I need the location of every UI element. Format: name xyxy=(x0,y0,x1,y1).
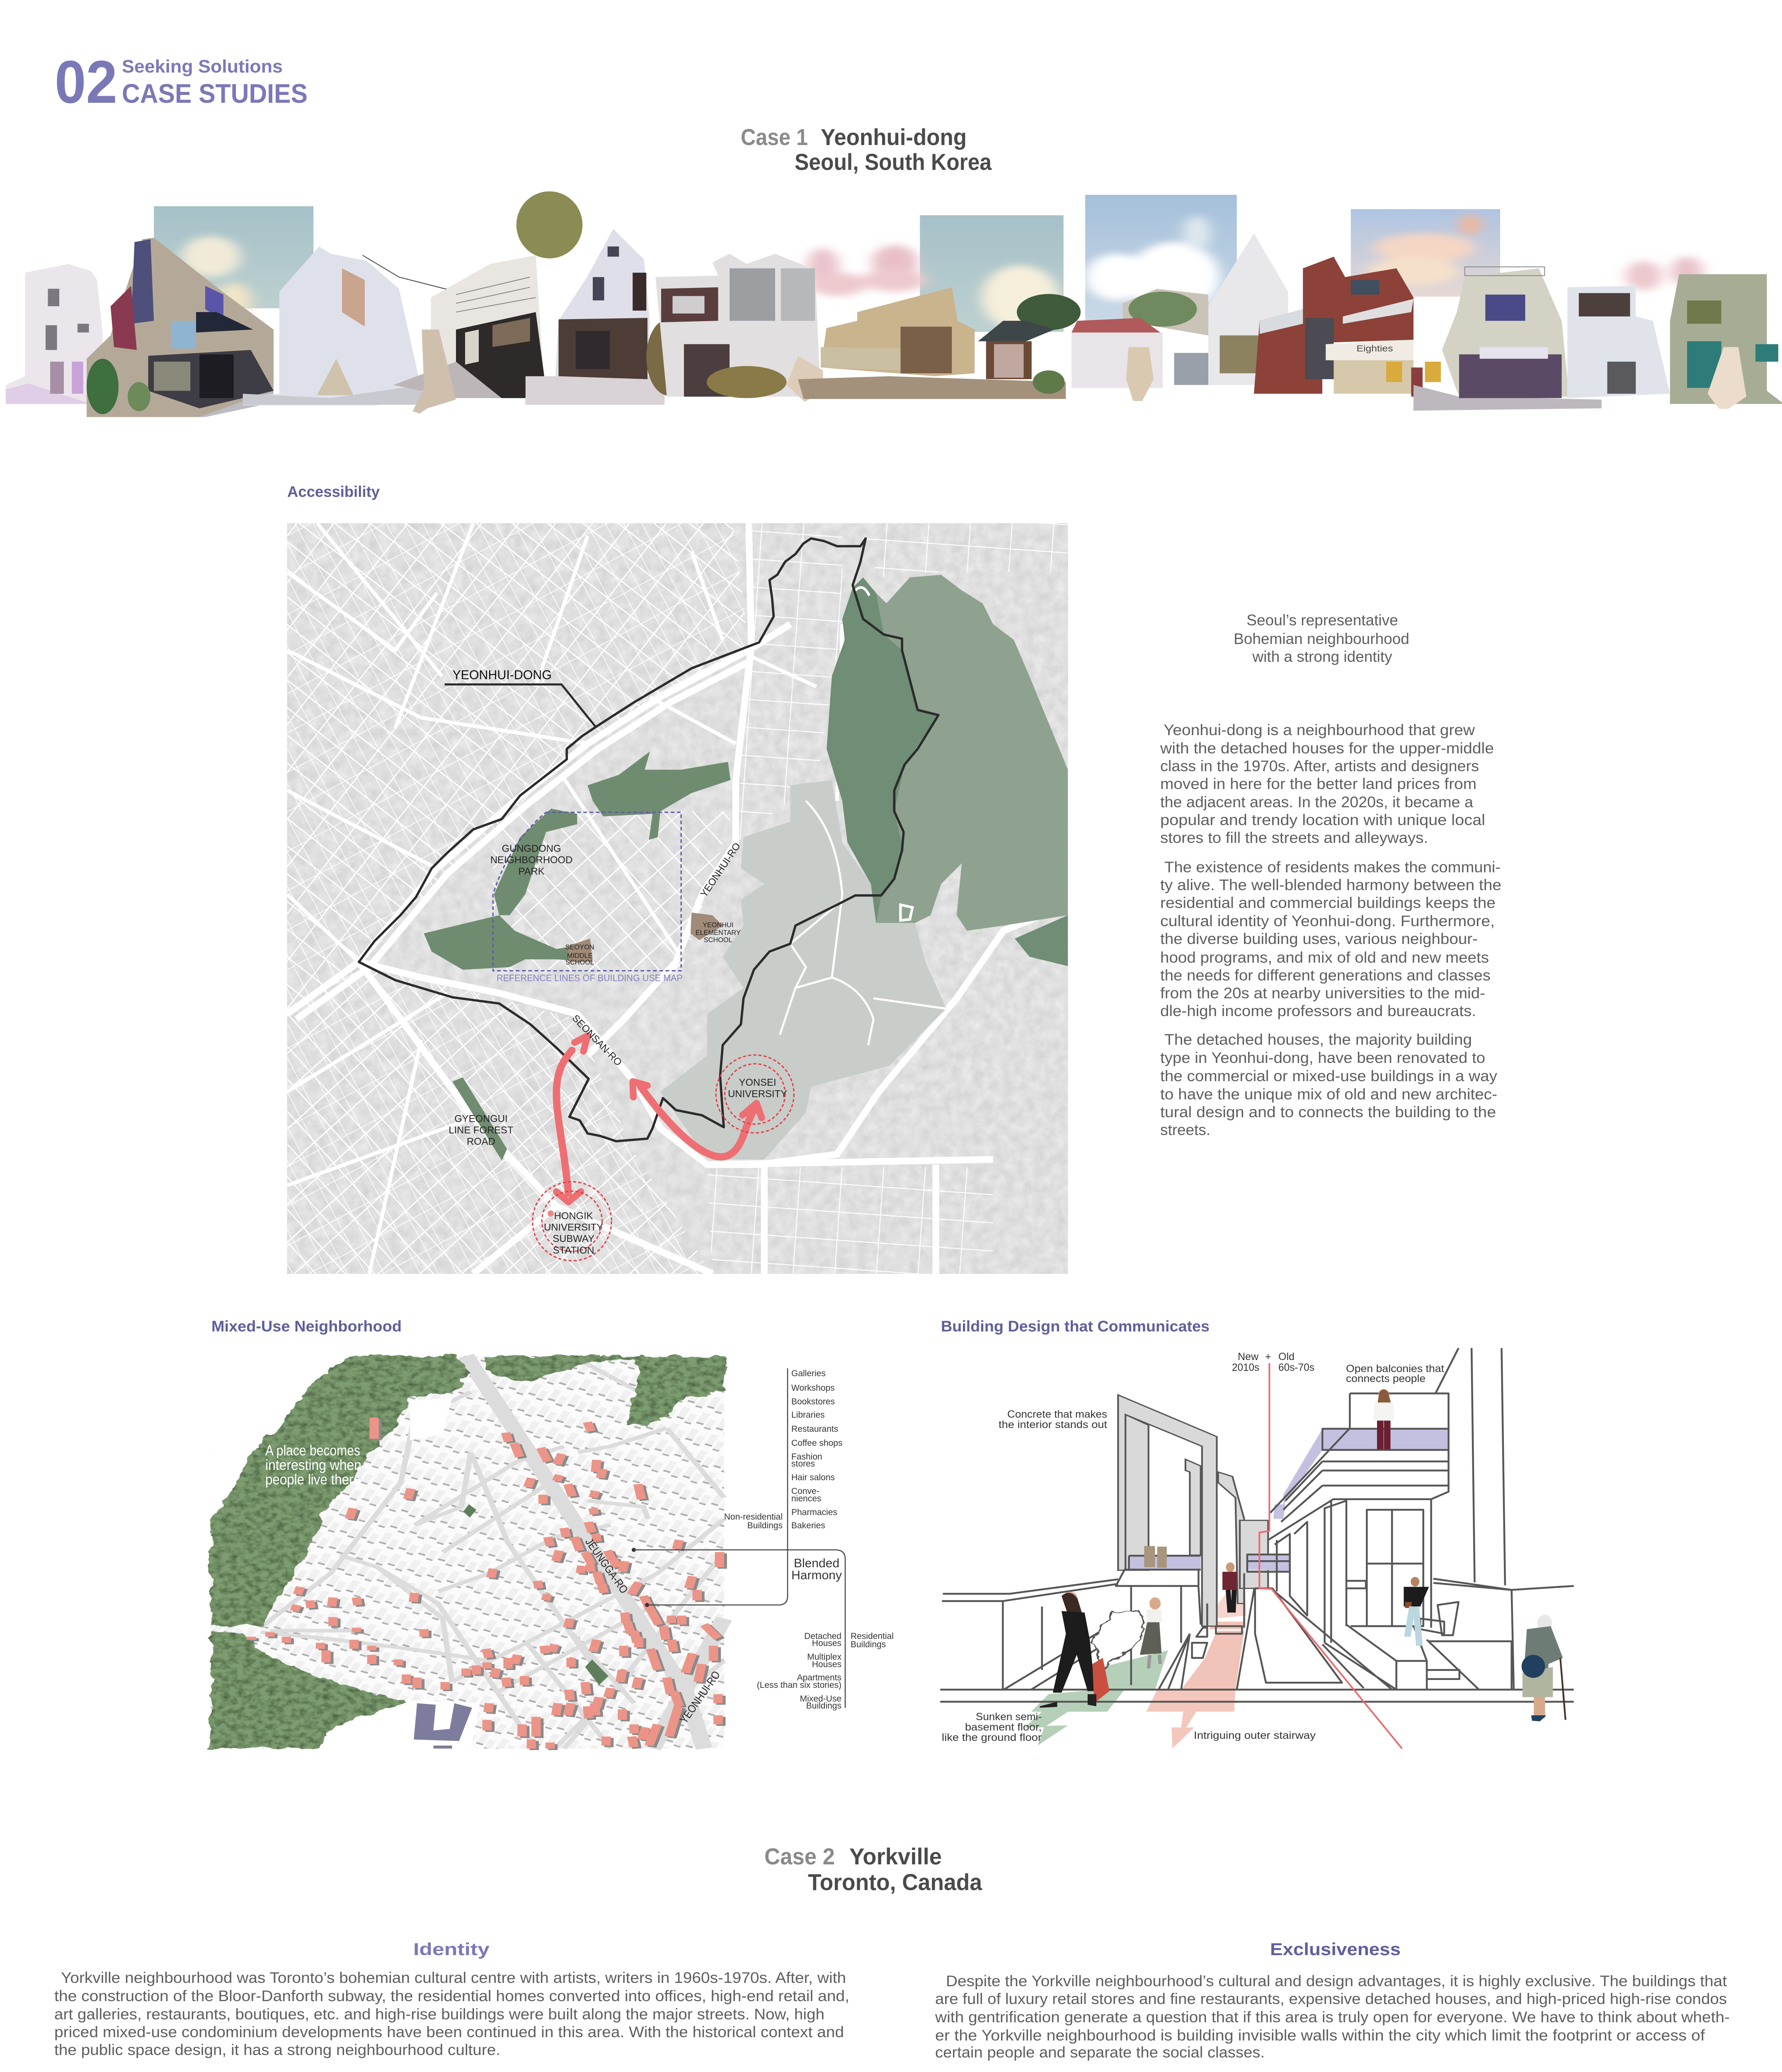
map place labels: SCHOOL xyxy=(565,959,594,966)
residential building list: Houses xyxy=(812,1639,841,1648)
case 1 title xyxy=(741,124,992,175)
alley annotations: connects people xyxy=(1346,1373,1426,1385)
alley annotations: Old xyxy=(1278,1351,1295,1363)
alley annotations: basement floor, xyxy=(965,1721,1042,1733)
Yeonhui-dong description: popular and trendy location with unique local xyxy=(1160,811,1485,828)
Yeonhui-dong description: from the 20s at nearby universities to the mid- xyxy=(1160,985,1485,1002)
case 1 title: Case 1 xyxy=(741,124,808,150)
Yeonhui-dong description: type in Yeonhui-dong, have been renovated to xyxy=(1160,1049,1485,1066)
person: woman with bag xyxy=(1404,1577,1429,1646)
Hongik University subway station marker: UNIVERSITY xyxy=(544,1222,603,1233)
intro statement xyxy=(1234,612,1409,665)
purple cafe building xyxy=(87,238,274,417)
map place labels: ROAD xyxy=(467,1136,495,1147)
intro statement: with a strong identity xyxy=(1252,648,1392,665)
map place labels: LINE FOREST xyxy=(449,1125,513,1136)
Yonsei University marker: UNIVERSITY xyxy=(728,1088,787,1099)
pink-roofed house xyxy=(1072,289,1214,401)
storefront building xyxy=(393,255,547,414)
alley annotations: Intriguing outer stairway xyxy=(1194,1730,1316,1741)
person: elderly woman with cane xyxy=(1522,1615,1566,1721)
Hongik University subway station marker: STATION xyxy=(553,1245,594,1256)
case 1 title: Seoul, South Korea xyxy=(795,149,992,175)
residential building list: Detached xyxy=(804,1631,841,1641)
map place labels: GYEONGUI xyxy=(454,1113,508,1125)
Yeonhui-dong description: the adjacent areas. In the 2020s, it became a xyxy=(1160,794,1473,811)
blended harmony legend connectors xyxy=(632,1368,845,1708)
building design heading: Building Design that Communicates xyxy=(941,1318,1210,1335)
white cone building xyxy=(243,247,536,405)
Yeonhui-dong description: dle-high income professors and bureaucrats. xyxy=(1160,1002,1476,1019)
Yeonhui-dong description: streets. xyxy=(1160,1121,1210,1138)
identity heading: Identity xyxy=(413,1939,490,1959)
residential building list xyxy=(757,1631,894,1711)
neighbourhood parks xyxy=(424,751,730,1160)
case 2 title: Toronto, Canada xyxy=(808,1869,982,1895)
small white house xyxy=(6,264,103,404)
alley annotations: New xyxy=(1238,1351,1259,1363)
street collage of Yeonhui-dong buildings xyxy=(6,191,1782,417)
identity text: the public space design, it has a strong neighbourhood culture. xyxy=(54,2041,500,2058)
map place labels: SCHOOL xyxy=(704,937,732,944)
non-residential building list: Bakeries xyxy=(791,1521,825,1530)
beige corner building xyxy=(1413,267,1602,411)
alley annotations xyxy=(942,1351,1444,1743)
residential building list: Buildings xyxy=(806,1701,841,1711)
Yeonhui-dong description: the diverse building uses, various neighbour- xyxy=(1160,930,1478,947)
map quote: people live there xyxy=(265,1472,361,1488)
red brick building: Eighties xyxy=(1357,344,1393,353)
case 2 title: Yorkville xyxy=(849,1843,942,1869)
balcony glazing xyxy=(1129,1429,1449,1572)
Hongik University subway station marker: HONGIK xyxy=(554,1210,593,1222)
section heading xyxy=(55,48,308,116)
map quote xyxy=(265,1443,361,1488)
exclusiveness text: certain people and separate the social classes. xyxy=(935,2044,1265,2061)
intro statement: Seoul’s representative xyxy=(1246,612,1398,629)
map place labels: YEONHUI-RO xyxy=(698,841,743,899)
residential building list: Apartments xyxy=(797,1673,841,1682)
non-residential building list: Coffee shops xyxy=(791,1438,842,1448)
map place labels: MIDDLE xyxy=(567,952,593,959)
exclusiveness text: with gentrification generate a question that if this area is truly open for everyone. We have to think about wheth- xyxy=(935,2009,1730,2026)
Yeonhui-dong description: Yeonhui-dong is a neighbourhood that grew xyxy=(1164,721,1475,738)
Yeonhui-dong description: class in the 1970s. After, artists and designers xyxy=(1160,758,1479,775)
exclusiveness text: Despite the Yorkville neighbourhood’s cultural and design advantages, it is highly exclusive. The buildings that xyxy=(946,1973,1727,1990)
map road names xyxy=(583,1536,722,1726)
map place labels: GUNGDONG xyxy=(502,843,561,854)
Yeonhui-dong description: tural design and to connects the building to the xyxy=(1160,1104,1496,1121)
residential building list: Mixed-Use xyxy=(800,1694,841,1704)
Yeonhui-dong description: to have the unique mix of old and new architec- xyxy=(1160,1086,1497,1103)
olive moon xyxy=(516,191,582,259)
reference lines of building use map xyxy=(493,812,683,983)
section heading: CASE STUDIES xyxy=(122,78,308,109)
map place labels: ELEMENTARY xyxy=(696,929,741,937)
alley annotations: Sunken semi- xyxy=(976,1711,1042,1723)
Yeonhui-dong description: with the detached houses for the upper-middle xyxy=(1160,740,1494,757)
exclusiveness text: er the Yorkville neighbourhood is building invisible walls within the city which limit the footprint or access of xyxy=(935,2027,1705,2044)
people in the alley xyxy=(1040,1389,1566,1721)
Yeonhui-dong description xyxy=(1160,721,1501,1138)
alley annotations: Open balconies that xyxy=(1346,1363,1444,1375)
case 2 title xyxy=(764,1843,982,1895)
non-residential building list: Fashion xyxy=(791,1452,822,1462)
pocket greens xyxy=(463,1504,609,1685)
new and old divider line xyxy=(1259,1363,1402,1749)
tan brick house and hanok gate xyxy=(798,287,1081,399)
Yeonhui-dong description: moved in here for the better land prices from xyxy=(1160,775,1477,792)
non-residential building list: Conve- xyxy=(791,1486,819,1496)
Yonsei campus area xyxy=(660,780,946,1159)
concrete frames xyxy=(1118,1395,1268,1626)
accessibility heading: Accessibility xyxy=(287,483,380,500)
map road names: JEUNGGA-RO xyxy=(583,1536,630,1596)
alley linework xyxy=(940,1348,1574,1702)
non-residential building list: stores xyxy=(791,1459,815,1469)
road network xyxy=(261,1356,724,1749)
Yeonhui-dong description: the commercial or mixed-use buildings in a way xyxy=(1160,1067,1498,1084)
case 2 title: Case 2 xyxy=(764,1843,835,1869)
non-residential building list: Buildings xyxy=(747,1521,783,1530)
residential building list: Buildings xyxy=(851,1640,886,1649)
walking route arrows xyxy=(556,1036,762,1202)
neighbourhood label with leader xyxy=(445,668,595,726)
alley annotations: + xyxy=(1265,1351,1271,1363)
case 1 title: Yeonhui-dong xyxy=(821,124,967,150)
Yeonhui-dong description: ty alive. The well-blended harmony between the xyxy=(1160,876,1501,893)
non-residential building list: niences xyxy=(791,1494,821,1503)
neighbourhood label with leader: YEONHUI-DONG xyxy=(452,668,552,682)
map place labels: PARK xyxy=(519,866,545,877)
Yeonhui-dong description: cultural identity of Yeonhui-dong. Furthermore, xyxy=(1160,913,1495,929)
person: man on stairs xyxy=(1222,1562,1237,1612)
non-residential building list: Libraries xyxy=(791,1410,825,1420)
university block xyxy=(414,1703,472,1749)
Yeonhui-dong description: residential and commercial buildings keeps the xyxy=(1160,894,1496,911)
map place labels: YEONHUI xyxy=(703,921,733,929)
Yeonhui-dong boundary line xyxy=(359,538,938,1141)
small white and green buildings xyxy=(1567,274,1782,409)
people on terrace xyxy=(1144,1546,1167,1568)
Yeonhui-dong description: hood programs, and mix of old and new meets xyxy=(1160,949,1489,966)
map road names: YEONHUI-RO xyxy=(677,1669,722,1726)
map place labels: SEOYON xyxy=(565,944,594,951)
Yeonhui-dong description: The existence of residents makes the communi- xyxy=(1164,859,1501,876)
non-residential building list: Bookstores xyxy=(791,1397,835,1406)
map quote: A place becomes xyxy=(265,1443,360,1459)
map place labels xyxy=(449,841,743,1147)
mixed-use buildings xyxy=(251,1418,722,1750)
identity text: priced mixed-use condominium developments have been continued in this area. With the historical context and xyxy=(54,2024,844,2041)
accessibility map xyxy=(287,523,1068,1274)
non-residential building list: Restaurants xyxy=(791,1424,838,1434)
person: woman in grey skirt xyxy=(1140,1598,1161,1668)
non-residential building list: Pharmacies xyxy=(791,1508,837,1517)
Yeonhui-dong description: the needs for different generations and classes xyxy=(1160,967,1491,984)
alley annotations: like the ground floor xyxy=(942,1732,1042,1743)
white gable house xyxy=(526,229,664,405)
alley annotations: Concrete that makes xyxy=(1007,1409,1107,1420)
building use map xyxy=(211,1356,724,1750)
white outer areas xyxy=(211,1356,480,1749)
large forest xyxy=(827,575,1068,966)
tall white house xyxy=(1208,233,1288,385)
Yonsei University marker xyxy=(716,1055,794,1133)
section heading: Seeking Solutions xyxy=(122,56,283,77)
alley perspective drawing xyxy=(940,1348,1574,1749)
blended harmony label: Harmony xyxy=(791,1569,842,1582)
blended harmony label xyxy=(791,1556,842,1582)
gray modern house xyxy=(646,254,823,402)
Hongik University subway station marker xyxy=(533,1182,611,1261)
mixed-use heading: Mixed-Use Neighborhood xyxy=(211,1318,402,1335)
blended harmony label: Blended xyxy=(794,1556,839,1570)
map place labels: SEONSAN-RO xyxy=(570,1013,624,1068)
Hongik University subway station marker: SUBWAY xyxy=(553,1233,594,1244)
green hillsides xyxy=(211,1356,724,1749)
person: woman on balcony xyxy=(1373,1389,1394,1449)
colored floors xyxy=(1025,1572,1246,1749)
exclusiveness heading: Exclusiveness xyxy=(1270,1939,1401,1959)
non-residential building list xyxy=(724,1369,842,1530)
residential building list: (Less than six stories) xyxy=(757,1680,841,1690)
Yeonhui-dong description: stores to fill the streets and alleyways. xyxy=(1160,829,1428,846)
alley annotations: the interior stands out xyxy=(999,1419,1107,1431)
Yonsei University marker: YONSEI xyxy=(739,1077,776,1088)
exclusiveness text xyxy=(935,1973,1730,2061)
map quote: interesting when xyxy=(265,1457,361,1473)
alley annotations: 60s-70s xyxy=(1278,1362,1314,1373)
map place labels: NEIGHBORHOOD xyxy=(490,854,572,866)
section heading: 02 xyxy=(55,48,117,116)
identity text xyxy=(54,1969,849,2058)
identity text: the construction of the Bloor-Danforth subway, the residential homes converted into offices, high-end retail and, xyxy=(54,1987,849,2004)
non-residential building list: Non-residential xyxy=(724,1512,783,1522)
exclusiveness text: are full of luxury retail stores and fine restaurants, expensive detached houses, and high-priced high-rise condos xyxy=(935,1990,1727,2007)
red brick building xyxy=(1254,257,1441,397)
school plots xyxy=(567,913,723,962)
residential building list: Houses xyxy=(812,1660,841,1669)
Yeonhui-dong description: The detached houses, the majority building xyxy=(1164,1031,1472,1048)
residential building list: Residential xyxy=(851,1631,894,1641)
reference lines of building use map: REFERENCE LINES OF BUILDING USE MAP xyxy=(497,973,683,983)
non-residential building list: Galleries xyxy=(791,1369,826,1378)
person: woman in black xyxy=(1040,1592,1109,1708)
identity text: art galleries, restaurants, boutiques, etc. and high-rise buildings were built along the major streets. Now, high xyxy=(54,2006,824,2023)
non-residential building list: Hair salons xyxy=(791,1473,835,1482)
intro statement: Bohemian neighbourhood xyxy=(1234,630,1409,647)
alley annotations: 2010s xyxy=(1232,1362,1259,1373)
residential building list: Multiplex xyxy=(807,1652,841,1662)
non-residential building list: Workshops xyxy=(791,1383,835,1393)
identity text: Yorkville neighbourhood was Toronto’s bohemian cultural centre with artists, writers in 1960s-1970s. After, with xyxy=(61,1969,846,1986)
white shrub xyxy=(1092,1610,1146,1667)
